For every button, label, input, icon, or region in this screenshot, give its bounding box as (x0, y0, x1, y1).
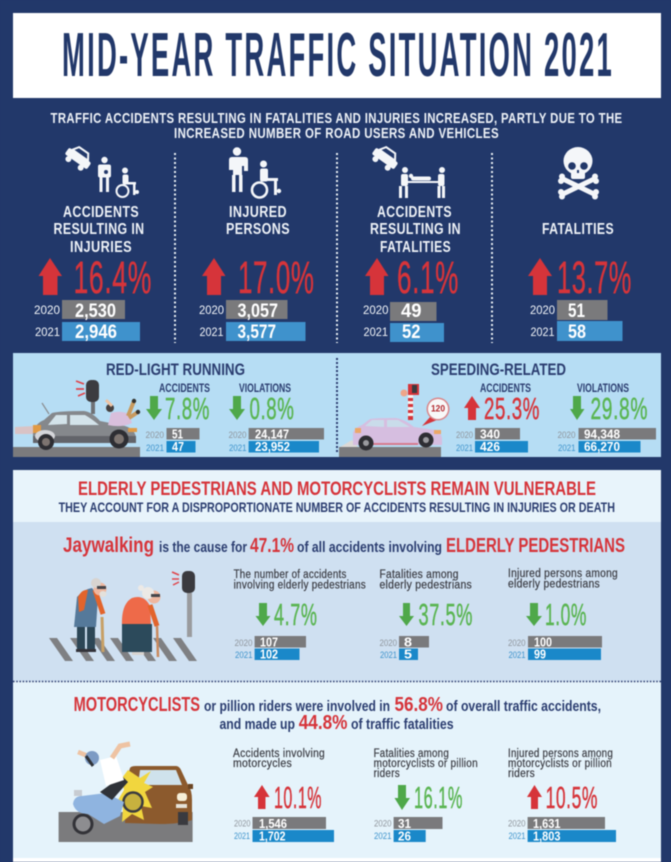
stat: fatalities among elderly pedestrians: 8 (404, 634, 412, 650)
bars: 3,577 (238, 322, 276, 343)
headline: of overall traffic accidents, (446, 699, 601, 715)
stat: accidents involving elderly pedestrians (234, 569, 366, 662)
bars: 2020 (530, 303, 555, 317)
label (226, 204, 290, 238)
bars: 2021 (364, 325, 388, 339)
stat: fatalities among motorcyclists: 16.1% (414, 780, 463, 815)
stat: accidents involving motorcycles: 2021 (234, 831, 250, 842)
stat: accidents involving elderly pedestrians: 102 (260, 646, 278, 662)
stat: fatalities among elderly pedestrians: Fatalities among (380, 569, 459, 581)
label: ACCIDENTS (377, 204, 452, 221)
intro text (50, 110, 622, 142)
stat: injured persons among elderly pedestrians: 2021 (508, 650, 526, 661)
stat: red-light accidents: 7.8% (165, 391, 210, 426)
stat: red-light violations: 24,147 (255, 426, 289, 442)
stat: fatalities among motorcyclists: 2020 (374, 818, 392, 830)
panel: elderly pedestrians and motorcyclists header (13, 470, 661, 862)
bars (363, 301, 444, 343)
percentage: 6.1% (397, 252, 459, 303)
stat: fatalities among motorcyclists: Fatalities among (374, 748, 449, 760)
icon: skull and crossbones (558, 147, 599, 200)
headline: of all accidents involving (297, 540, 442, 556)
label: RESULTING IN (370, 221, 461, 238)
panel: injured persons (199, 147, 314, 343)
stat: injured persons among motorcyclists (508, 748, 616, 844)
stat: accidents involving motorcycles (233, 748, 334, 844)
label: PERSONS (226, 221, 290, 238)
stat: injured persons among motorcyclists: 1,631 (533, 816, 560, 831)
headline: and made up (220, 717, 295, 733)
intro text: INCREASED NUMBER OF ROAD USERS AND VEHICLES (174, 125, 499, 142)
heading: speeding-related: SPEEDING-RELATED (431, 360, 566, 379)
illustration: elderly pedestrians crossing (49, 571, 197, 661)
stat: speeding violations: 2020 (558, 430, 576, 441)
stat: red-light violations (228, 381, 324, 454)
label (370, 204, 461, 256)
stat: accidents involving motorcycles: 1,702 (259, 828, 286, 844)
label: FATALITIES (542, 221, 614, 238)
label: INJURED (229, 204, 287, 221)
stat: accidents involving motorcycles: 10.1% (274, 780, 322, 815)
arrow up (528, 258, 552, 295)
stat: red-light accidents (146, 381, 210, 454)
stat: injured persons among motorcyclists: Injured persons among (508, 748, 613, 760)
label (54, 204, 144, 256)
bars: 2,530 (75, 301, 116, 322)
stat: accidents involving motorcycles: 1,546 (259, 816, 287, 831)
stat: fatalities among elderly pedestrians: 2020 (380, 638, 397, 649)
icon: crashed car and stretcher (369, 143, 445, 198)
headline: is the cause for (159, 540, 247, 556)
bars: 2021 (35, 325, 60, 339)
stat: fatalities among motorcyclists: 2021 (374, 831, 392, 842)
stat: red-light violations: 2020 (228, 430, 246, 441)
bars (530, 300, 622, 343)
stat: speeding violations: VIOLATIONS (577, 381, 629, 395)
stat: red-light accidents: 51 (172, 426, 183, 442)
headline: Jaywalking (63, 534, 154, 557)
stat: red-light accidents: 2021 (146, 443, 164, 454)
stat: injured persons among elderly pedestrians: 99 (534, 646, 546, 662)
stat: red-light accidents: ACCIDENTS (159, 381, 210, 395)
panel: accidents resulting in injuries (34, 143, 152, 343)
stat: accidents involving motorcycles: Accidents involving (233, 748, 325, 760)
panel: fatalities (528, 147, 632, 343)
bars: 2021 (530, 325, 555, 339)
arrow up (202, 258, 226, 295)
bars (34, 300, 140, 343)
stat: speeding accidents: 25.3% (484, 391, 540, 426)
stat: speeding violations: 2021 (558, 443, 576, 454)
label: RESULTING IN (54, 221, 144, 238)
stat: injured persons among elderly pedestrians: Injured persons among (508, 568, 618, 580)
stat: speeding accidents: 340 (480, 426, 500, 442)
stat: red-light violations: 23,952 (255, 439, 290, 454)
stat: fatalities among motorcyclists (374, 748, 478, 844)
stat: red-light violations: 0.8% (250, 391, 294, 426)
illustration: speeding car and camera: 120 (431, 404, 445, 414)
illustration: speeding car and camera (339, 384, 450, 457)
label: INJURIES (70, 239, 132, 256)
bars: 49 (401, 301, 422, 322)
bars: 2020 (363, 303, 389, 317)
headline (63, 534, 625, 557)
panel: accidents resulting in fatalities (363, 143, 461, 343)
headline: or pillion riders were involved in (204, 699, 390, 715)
stat: injured persons among motorcyclists: 1,803 (533, 828, 560, 844)
headline (74, 694, 601, 734)
stat: injured persons among elderly pedestrians: elderly pedestrians (508, 578, 600, 590)
bars: 51 (568, 301, 585, 322)
stat: injured persons among elderly pedestrians: 1.0% (545, 597, 587, 632)
illustration: motorcycle collision (59, 744, 193, 842)
bars: 2020 (34, 303, 60, 317)
stat: speeding accidents (456, 381, 540, 454)
stat: speeding accidents: 2020 (456, 430, 473, 441)
headline: of traffic fatalities (351, 717, 454, 733)
bars: 2,946 (75, 322, 117, 343)
label: ACCIDENTS (63, 204, 139, 221)
bars: 52 (402, 322, 420, 343)
stat: accidents involving elderly pedestrians: 2020 (234, 638, 252, 649)
stat: red-light violations: VIOLATIONS (239, 381, 291, 395)
stat: red-light accidents: 47 (172, 439, 184, 454)
bars: 3,057 (238, 301, 278, 322)
stat: injured persons among elderly pedestrians: 2020 (508, 638, 526, 649)
icon: injured person and wheelchair (229, 147, 281, 198)
headline: 56.8% (394, 694, 443, 716)
stat: injured persons among motorcyclists: 2020 (508, 818, 526, 830)
stat: accidents involving elderly pedestrians: 4.7% (274, 597, 318, 632)
bars: 2021 (200, 325, 224, 339)
headline: 47.1% (250, 535, 294, 557)
stat: injured persons among elderly pedestrians (508, 568, 618, 662)
stat: fatalities among elderly pedestrians: 2021 (380, 650, 397, 661)
icon: crashed car, injured person, wheelchair (62, 143, 139, 197)
stat: fatalities among motorcyclists: riders (374, 768, 400, 780)
panel: motorcyclists (13, 683, 661, 862)
bars: 58 (568, 322, 586, 343)
stat: accidents involving elderly pedestrians: The number of accidents (234, 569, 347, 581)
heading: red-light running: RED-LIGHT RUNNING (106, 360, 245, 379)
stat: speeding accidents: 2021 (456, 443, 473, 454)
bars (199, 300, 306, 343)
stat: injured persons among motorcyclists: motorcyclists or pillion (508, 758, 612, 770)
stat: speeding violations (558, 381, 656, 454)
stat: injured persons among motorcyclists: 2021 (508, 831, 526, 842)
stat: fatalities among motorcyclists: 26 (398, 828, 411, 844)
stat: red-light accidents: 2020 (146, 430, 164, 441)
panel: red-light running and speeding (13, 353, 661, 457)
stat: speeding accidents: ACCIDENTS (480, 381, 531, 395)
arrow up (365, 258, 388, 295)
panel: elderly pedestrians (13, 522, 661, 681)
stat: accidents involving elderly pedestrians: 2021 (235, 650, 252, 661)
stat: accidents involving elderly pedestrians: 107 (260, 634, 278, 650)
stat: accidents involving motorcycles: 2020 (234, 818, 250, 830)
percentage: 17.0% (238, 252, 314, 303)
stat: red-light violations: 2021 (229, 443, 246, 454)
percentage: 16.4% (74, 252, 152, 303)
stat: accidents involving motorcycles: motorcycles (233, 758, 292, 770)
illustration: red-light running car (13, 380, 140, 457)
stat: fatalities among motorcyclists: 31 (398, 816, 411, 831)
stat: fatalities among elderly pedestrians (380, 569, 473, 662)
stat: fatalities among motorcyclists: motorcyclists or pillion (374, 758, 478, 770)
stat: speeding violations: 66,270 (584, 439, 620, 454)
stat: fatalities among elderly pedestrians: elderly pedestrians (380, 580, 472, 592)
arrow up (38, 258, 62, 295)
stat: injured persons among motorcyclists: 10.5% (546, 780, 598, 815)
bars: 2020 (199, 303, 224, 317)
stat: injured persons among motorcyclists: riders (508, 768, 535, 780)
stat: fatalities among elderly pedestrians: 37.5% (418, 597, 473, 632)
stat: speeding accidents: 426 (480, 439, 500, 454)
stat: fatalities among elderly pedestrians: 5 (404, 646, 412, 662)
headline: 44.8% (299, 712, 348, 734)
headline: MOTORCYCLISTS (74, 694, 200, 716)
stat: speeding violations: 94,348 (584, 426, 620, 442)
label: FATALITIES (380, 239, 451, 256)
stat: injured persons among elderly pedestrians: 100 (534, 634, 552, 650)
stat: accidents involving elderly pedestrians: involving elderly pedestrians (234, 580, 366, 592)
